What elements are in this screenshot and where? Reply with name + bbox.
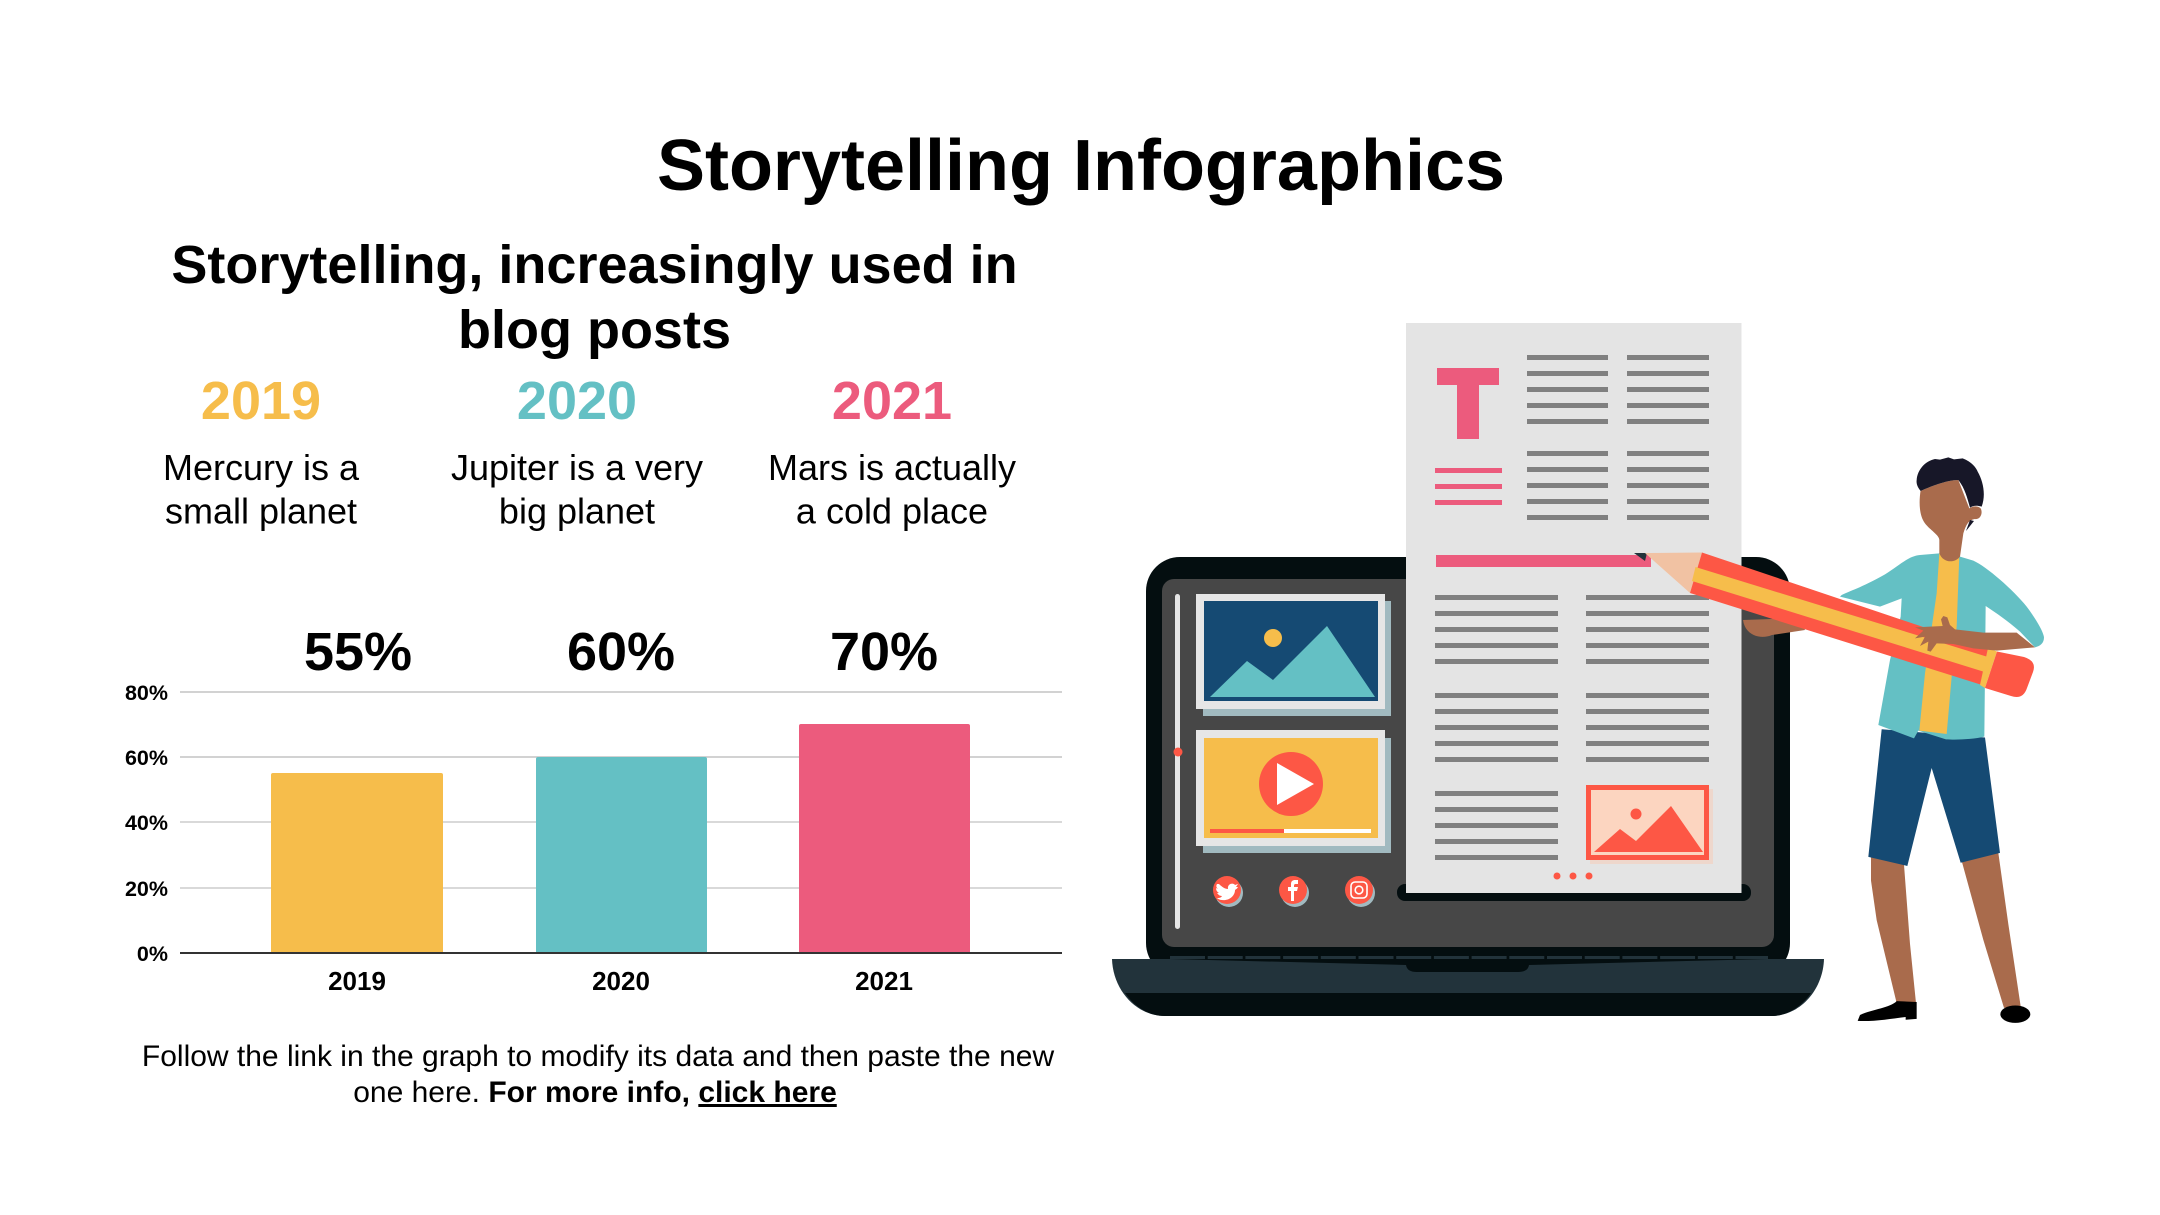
y axis labels: 40% xyxy=(125,811,168,835)
paper shadow bar xyxy=(1397,884,1751,901)
value labels: 55% xyxy=(304,622,412,682)
year 2019 xyxy=(163,371,360,532)
value labels: 70% xyxy=(830,622,938,682)
pencil xyxy=(1634,552,2034,697)
laptop bezel xyxy=(1146,557,1790,977)
back hand xyxy=(1743,618,1805,637)
shoes xyxy=(1858,1001,2030,1023)
pink highlight bar xyxy=(1436,555,1651,567)
year 2021: a cold place xyxy=(796,490,988,532)
shirt xyxy=(1919,553,1959,734)
lower body xyxy=(1858,729,2030,1023)
year 2020: Jupiter is a very xyxy=(451,447,703,488)
bar 2020 xyxy=(536,757,707,953)
shorts xyxy=(1868,729,2000,866)
subheading: Storytelling, increasingly used in xyxy=(171,235,1018,295)
value labels: 60% xyxy=(567,622,675,682)
icon: twitter xyxy=(1213,876,1243,907)
laptop base xyxy=(1112,959,1824,1016)
bar 2019 xyxy=(271,773,443,953)
x axis labels: 2020 xyxy=(592,966,650,996)
year 2021: Mars is actually xyxy=(768,447,1016,488)
footer note: Follow the link in the graph to modify its data and then paste the new xyxy=(142,1040,1054,1073)
year 2020 xyxy=(451,371,703,532)
x axis labels: 2021 xyxy=(855,966,913,996)
illustration: document page xyxy=(1406,323,1742,893)
subheading: blog posts xyxy=(458,300,731,360)
hair xyxy=(1917,457,1984,531)
x axis labels: 2019 xyxy=(328,966,386,996)
head xyxy=(1917,457,1984,561)
year 2020: big planet xyxy=(499,490,655,532)
face and neck xyxy=(1920,480,1982,561)
footer note: one here. xyxy=(353,1076,488,1109)
y axis labels: 0% xyxy=(137,942,168,966)
bar 2021 xyxy=(799,724,970,953)
scrollbar xyxy=(1175,594,1180,929)
bar chart xyxy=(125,622,1062,996)
footer note: For more info, click here xyxy=(488,1076,837,1109)
year 2019: Mercury is a xyxy=(163,447,360,488)
small picture xyxy=(1588,788,1713,864)
y axis labels: 80% xyxy=(125,681,168,705)
video card xyxy=(1196,730,1391,853)
year 2021 xyxy=(768,371,1016,532)
image card xyxy=(1196,594,1391,716)
y axis labels: 60% xyxy=(125,746,168,770)
x axis labels xyxy=(328,966,913,996)
letter T xyxy=(1437,368,1499,439)
y axis labels xyxy=(125,681,168,966)
panel: year columns xyxy=(163,371,1016,532)
icon: facebook xyxy=(1279,876,1309,907)
year 2020: 2020 xyxy=(517,371,637,431)
year 2021: 2021 xyxy=(832,371,952,431)
laptop screen xyxy=(1162,579,1774,947)
jacket xyxy=(1840,553,2044,740)
front arm and hand xyxy=(1915,616,2035,652)
illustration: laptop xyxy=(1112,557,1824,1016)
upper body xyxy=(1840,553,2044,740)
text lines top xyxy=(1527,355,1709,520)
title: Storytelling Infographics xyxy=(657,126,1505,206)
illustration: person xyxy=(1840,457,2044,1023)
legs xyxy=(1871,853,2021,1008)
icon: instagram xyxy=(1345,876,1375,907)
year 2019: 2019 xyxy=(201,371,321,431)
value labels xyxy=(304,622,938,682)
year 2019: small planet xyxy=(165,490,357,532)
text lines bottom xyxy=(1435,595,1709,860)
keyboard strip xyxy=(1170,956,1768,960)
pink heading lines xyxy=(1435,468,1502,505)
page dots xyxy=(1554,872,1592,880)
y axis labels: 20% xyxy=(125,877,168,901)
